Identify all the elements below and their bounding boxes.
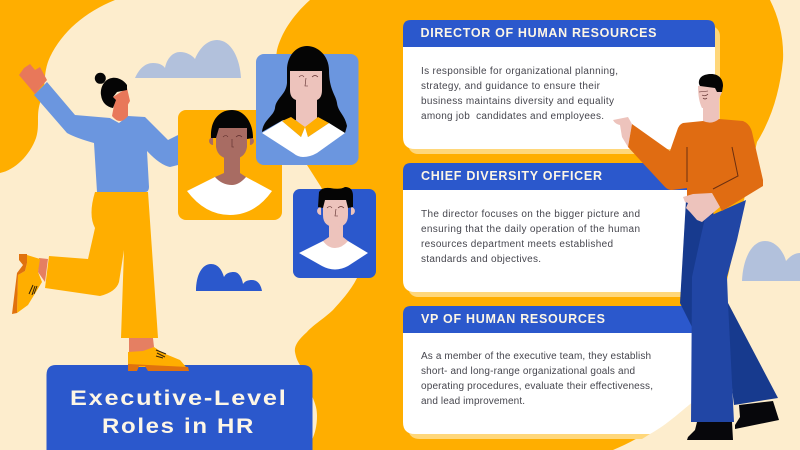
facial features [299, 76, 318, 86]
card body [403, 40, 715, 149]
cloud: right [742, 241, 800, 281]
back leg upper [680, 200, 715, 327]
card text [421, 66, 618, 122]
lower hand [683, 193, 720, 222]
sweater [34, 82, 178, 192]
card header [403, 20, 715, 47]
card shadow [408, 200, 700, 297]
card text: strategy, and guidance to ensure their [421, 81, 601, 92]
cloud: top left [135, 40, 241, 78]
card text: short- and long-range organizational goals and [421, 366, 635, 377]
card text: and lead improvement. [421, 396, 525, 407]
face [216, 127, 247, 159]
back leg lower [725, 303, 778, 405]
card text: among job candidates and employees. [421, 111, 604, 122]
neck [703, 100, 719, 124]
white shirt [299, 241, 368, 270]
hair [699, 74, 723, 92]
yellow collar [282, 117, 329, 137]
neck [112, 100, 128, 121]
tile [256, 54, 358, 165]
sweater folds [687, 147, 738, 189]
card text: As a member of the executive team, they establish [421, 351, 651, 362]
hair [318, 187, 353, 208]
title block: Roles in HR [102, 414, 255, 438]
face and neck [290, 71, 322, 130]
card text: business maintains diversity and equality [421, 96, 614, 107]
figure: woman [12, 64, 189, 371]
card text: Is responsible for organizational planning, [421, 66, 618, 77]
facial features [327, 206, 344, 216]
card header [403, 306, 700, 333]
avatar: woman on blue tile [256, 46, 358, 165]
card text: resources department meets established [421, 239, 613, 250]
tile [293, 189, 376, 278]
title text: Executive-Level [70, 386, 288, 410]
card text [421, 209, 640, 265]
sweater [628, 119, 763, 211]
card text: standards and objectives. [421, 254, 541, 265]
title box [46, 365, 312, 450]
hand [19, 64, 47, 94]
woman trousers [45, 192, 158, 338]
card text [421, 351, 653, 407]
neck [323, 222, 348, 248]
long hair [262, 46, 347, 133]
ears [209, 137, 254, 145]
title block [46, 365, 312, 450]
card header [403, 163, 700, 190]
pointing hand [613, 117, 632, 147]
hair [95, 73, 127, 108]
card text: The director focuses on the bigger picture and [421, 209, 640, 220]
face [698, 84, 722, 108]
hair [211, 110, 253, 139]
facial features [223, 136, 242, 147]
tile [178, 110, 282, 220]
ears and face [317, 200, 355, 227]
back shoe [735, 401, 779, 429]
avatar: man on orange tile [178, 110, 282, 220]
white shirt [262, 121, 345, 157]
card heading: CHIEF DIVERSITY OFFICER [421, 169, 602, 183]
neck [215, 155, 246, 185]
card text: ensuring that the daily operation of the human [421, 224, 640, 235]
glasses and smile [699, 91, 708, 99]
face [113, 88, 130, 108]
white shirt [187, 177, 272, 215]
cloud: small blue [196, 264, 262, 291]
left orange blob [0, 0, 115, 173]
central orange blob [275, 0, 783, 450]
front shoe [128, 347, 189, 371]
card shadow [408, 345, 650, 439]
front shoe [687, 422, 733, 440]
card heading: VP OF HUMAN RESOURCES [421, 312, 605, 326]
front leg [691, 200, 746, 422]
panel: vp of human resources [403, 306, 700, 439]
card shadow [408, 26, 720, 154]
panel: chief diversity officer [403, 163, 700, 297]
figure: man pointing [613, 74, 779, 440]
woman ankles [38, 258, 154, 352]
avatar: man on blue tile [293, 187, 376, 278]
card body [403, 180, 700, 292]
panel: director of human resources [403, 20, 720, 154]
rear shoe [12, 254, 42, 314]
card text: operating procedures, evaluate their effectiveness, [421, 381, 653, 392]
card heading: DIRECTOR OF HUMAN RESOURCES [420, 26, 656, 40]
card body [403, 325, 700, 434]
